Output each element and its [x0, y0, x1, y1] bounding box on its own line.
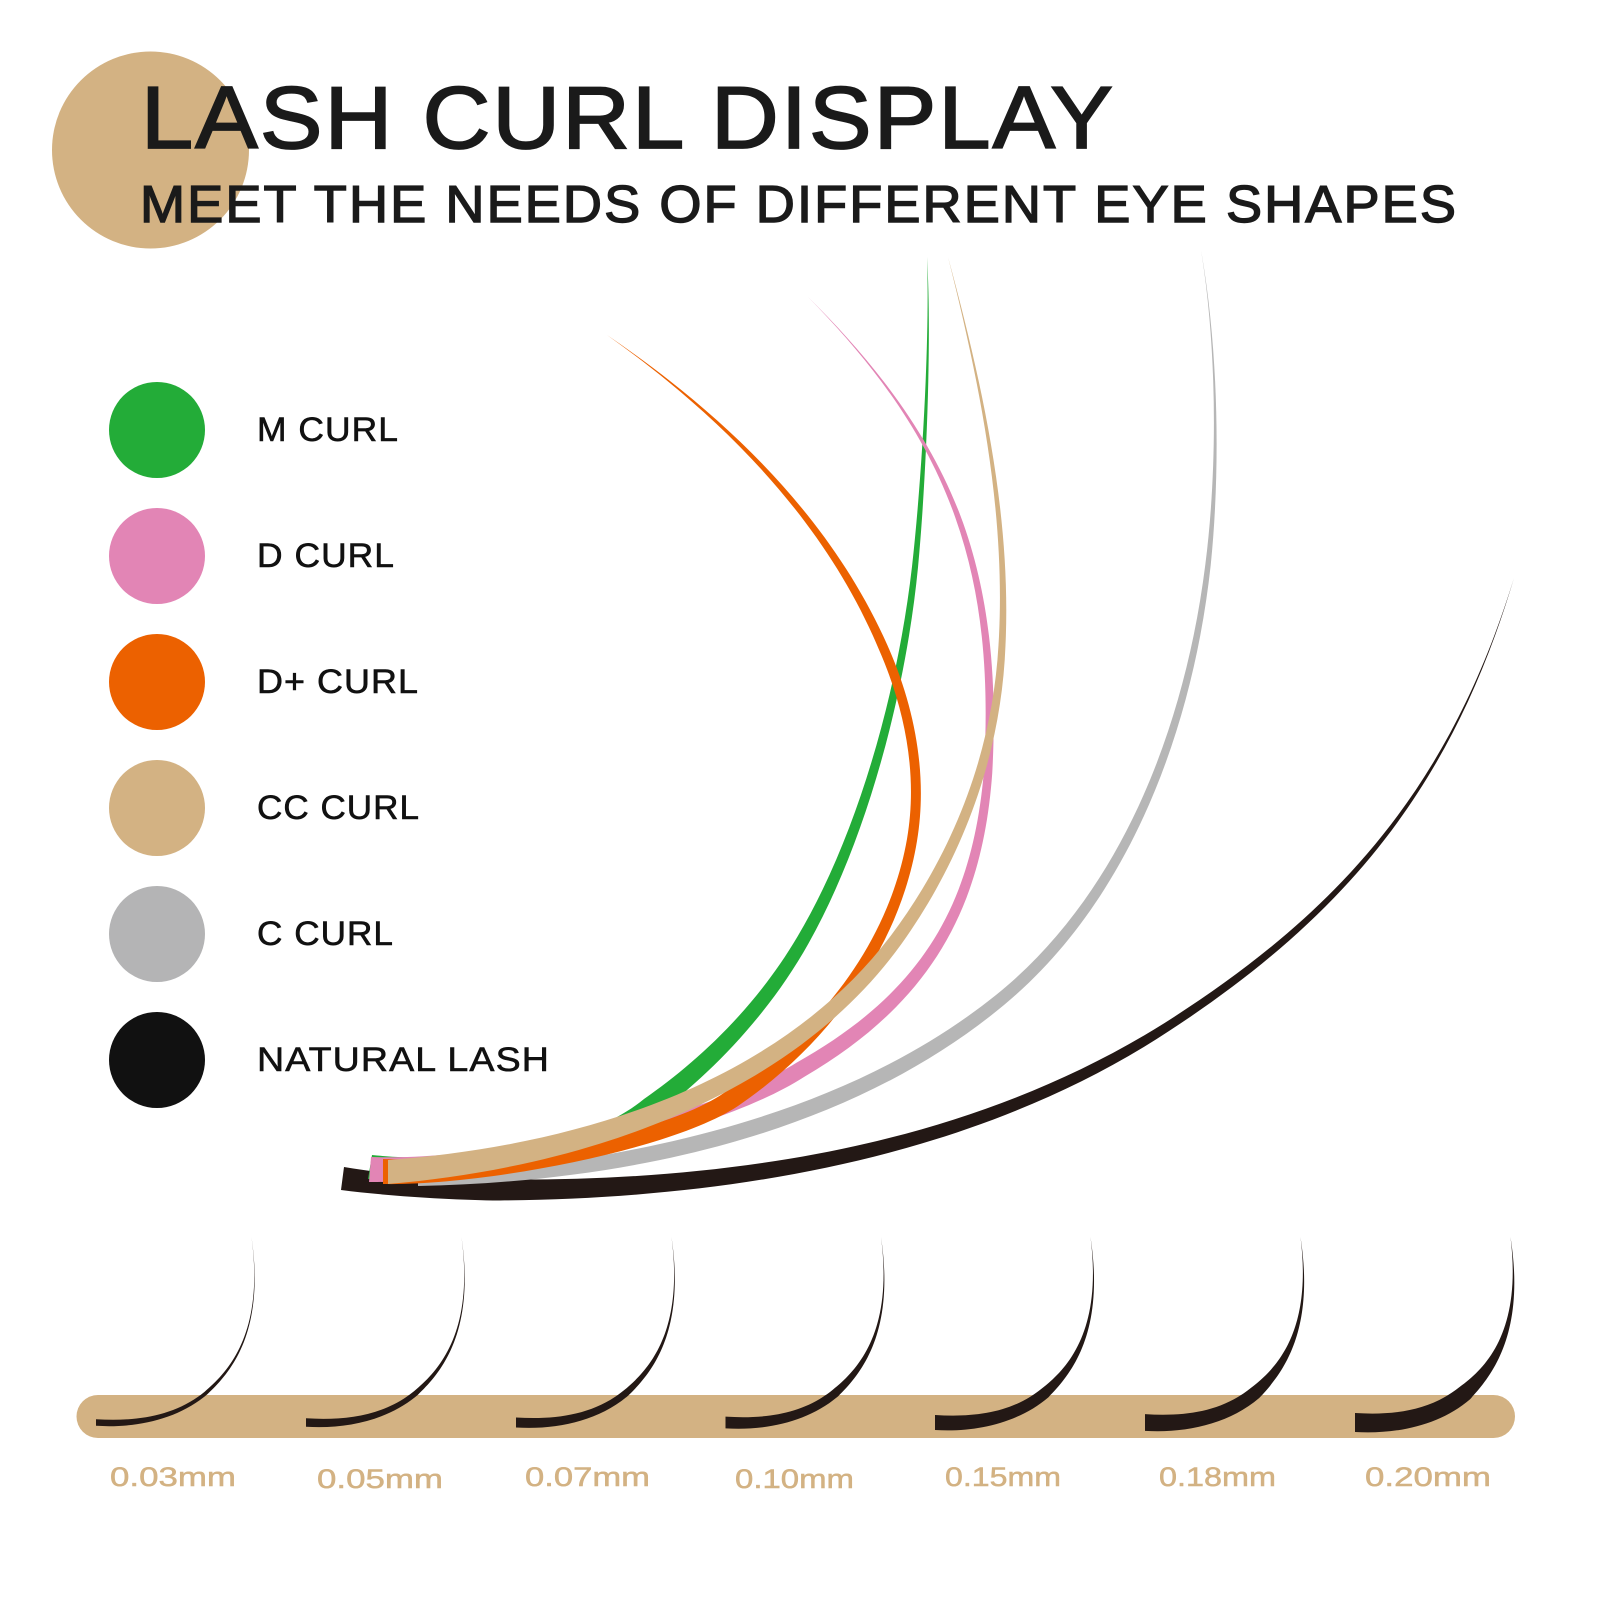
legend item: D curl: D CURL — [257, 537, 395, 575]
subtitle: MEET THE NEEDS OF DIFFERENT EYE SHAPES — [140, 176, 1458, 234]
D+ curl curve — [383, 335, 921, 1184]
lash sample 0.10mm — [726, 1237, 884, 1429]
lash sample 0.18mm — [1145, 1237, 1304, 1431]
label 0.03mm: 0.03mm — [110, 1462, 236, 1492]
legend item: D+ curl — [109, 634, 419, 730]
thickness labels — [110, 1462, 1491, 1494]
legend item: C curl: C CURL — [257, 915, 394, 953]
legend item: M curl — [109, 382, 399, 478]
legend item: M curl: M CURL — [257, 411, 399, 449]
legend item: natural lash — [109, 1012, 550, 1108]
natural lash curve — [341, 578, 1514, 1200]
label 0.15mm: 0.15mm — [945, 1462, 1061, 1492]
legend item: CC curl — [109, 760, 420, 856]
tan thickness bar — [76, 1395, 1515, 1438]
title: LASH CURL DISPLAY — [141, 68, 1115, 167]
label 0.05mm: 0.05mm — [317, 1464, 443, 1494]
legend item: D+ curl: D+ CURL — [257, 663, 419, 701]
D curl curve — [369, 297, 994, 1182]
label 0.18mm: 0.18mm — [1159, 1462, 1276, 1492]
label 0.07mm: 0.07mm — [525, 1462, 650, 1492]
legend item: natural lash: NATURAL LASH — [257, 1041, 550, 1079]
legend item: D curl — [109, 508, 395, 604]
curl comparison chart — [341, 250, 1514, 1200]
legend item: CC curl: CC CURL — [257, 789, 420, 827]
lash sample 0.05mm — [306, 1237, 465, 1427]
lash thickness samples — [96, 1237, 1514, 1432]
lash sample 0.15mm — [935, 1237, 1094, 1430]
legend item: C curl — [109, 886, 394, 982]
lash sample 0.07mm — [516, 1237, 675, 1428]
lash sample 0.03mm — [96, 1237, 255, 1426]
label 0.10mm: 0.10mm — [735, 1464, 854, 1494]
decorative tan circle behind title — [52, 52, 249, 248]
label 0.20mm: 0.20mm — [1365, 1462, 1491, 1492]
CC curl curve — [388, 257, 1006, 1184]
M curl curve — [368, 257, 929, 1179]
lash sample 0.20mm — [1355, 1237, 1514, 1432]
legend — [109, 382, 550, 1108]
C curl curve — [418, 250, 1217, 1186]
